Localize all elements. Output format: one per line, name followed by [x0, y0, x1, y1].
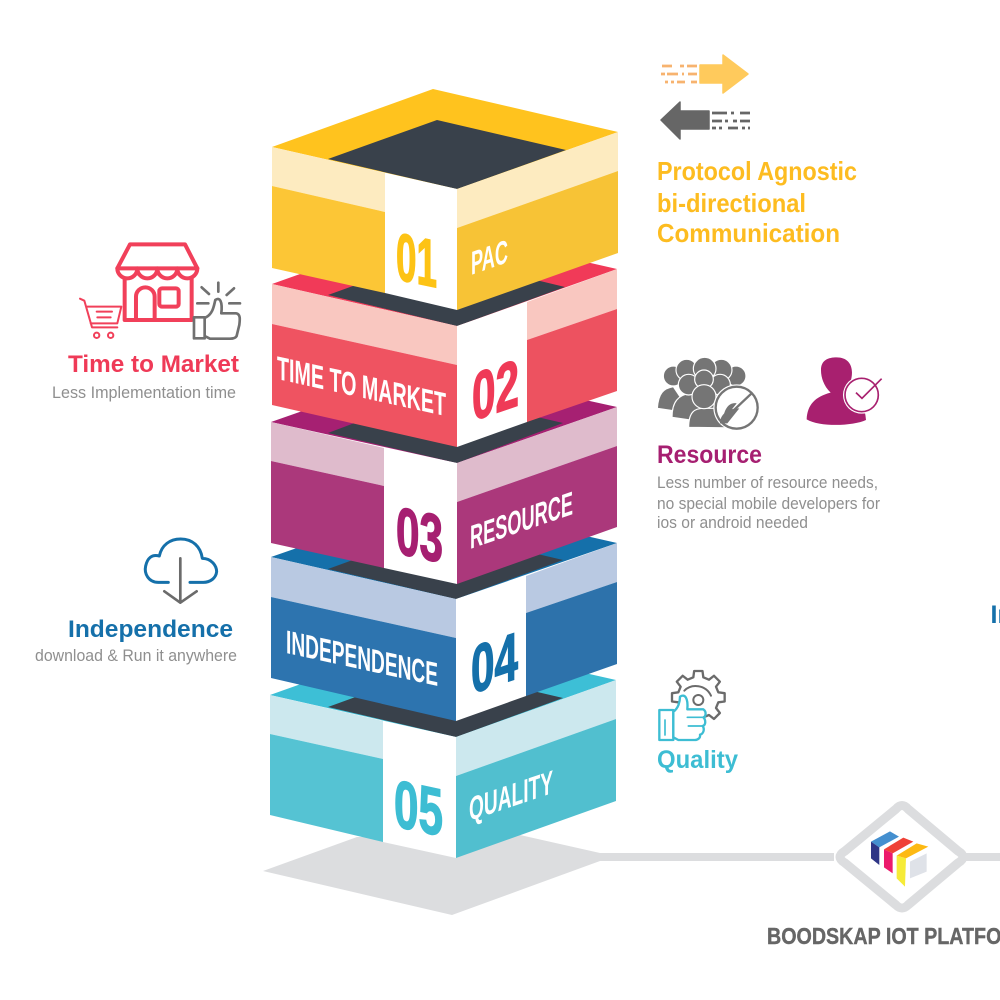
- label PAC: PAC: [471, 233, 508, 283]
- text: resource description: no special mobile developers for: [657, 494, 880, 513]
- number 01: 01: [396, 220, 437, 302]
- icon: outgoing data arrow: [661, 55, 748, 93]
- label QUALITY: QUALITY: [469, 764, 553, 829]
- heading: time to market: Time to Market: [68, 351, 239, 378]
- number 04: 04: [471, 618, 518, 709]
- block 02: time to market: [272, 227, 617, 447]
- text: resource description: [657, 473, 880, 532]
- base shadow: [263, 835, 834, 915]
- text: resource description: ios or android needed: [657, 513, 808, 532]
- number 03: 03: [396, 494, 443, 578]
- heading: protocol agnostic: Protocol Agnostic: [657, 156, 857, 186]
- icon: purple person with check: [807, 357, 882, 425]
- heading: protocol agnostic: bi-directional: [657, 188, 806, 218]
- icon: incoming data arrow: [661, 102, 750, 139]
- heading: independence: Independence: [68, 616, 233, 643]
- heading: protocol agnostic: [657, 156, 857, 248]
- text: less implementation time: Less Implementation time: [52, 383, 236, 402]
- block 04: independence: [271, 501, 617, 721]
- label RESOURCE: RESOURCE: [470, 485, 573, 557]
- connector line to platform: [965, 853, 1000, 861]
- heading: protocol agnostic: Communication: [657, 218, 840, 248]
- platform diamond with logo: [840, 806, 963, 908]
- block 05: quality: [270, 638, 616, 858]
- number 02: 02: [472, 345, 519, 436]
- heading: quality: Quality: [657, 746, 738, 774]
- icon: store with cart and thumbs up: [80, 244, 240, 339]
- icon: gear and thumbs up: [659, 671, 725, 740]
- label TIME TO MARKET: TIME TO MARKET: [277, 350, 446, 424]
- text: download and run: download & Run it anywhere: [35, 646, 237, 665]
- number 05: 05: [394, 767, 443, 851]
- icon: resource crowd: [657, 357, 760, 431]
- text: resource description: Less number of resource needs,: [657, 473, 878, 492]
- logo: [871, 831, 928, 887]
- icon: cloud download: [145, 539, 217, 603]
- block 01: PAC: [272, 89, 618, 310]
- label INDEPENDENCE: INDEPENDENCE: [286, 624, 438, 694]
- heading: resource: Resource: [657, 441, 762, 469]
- block 03: resource: [271, 366, 617, 584]
